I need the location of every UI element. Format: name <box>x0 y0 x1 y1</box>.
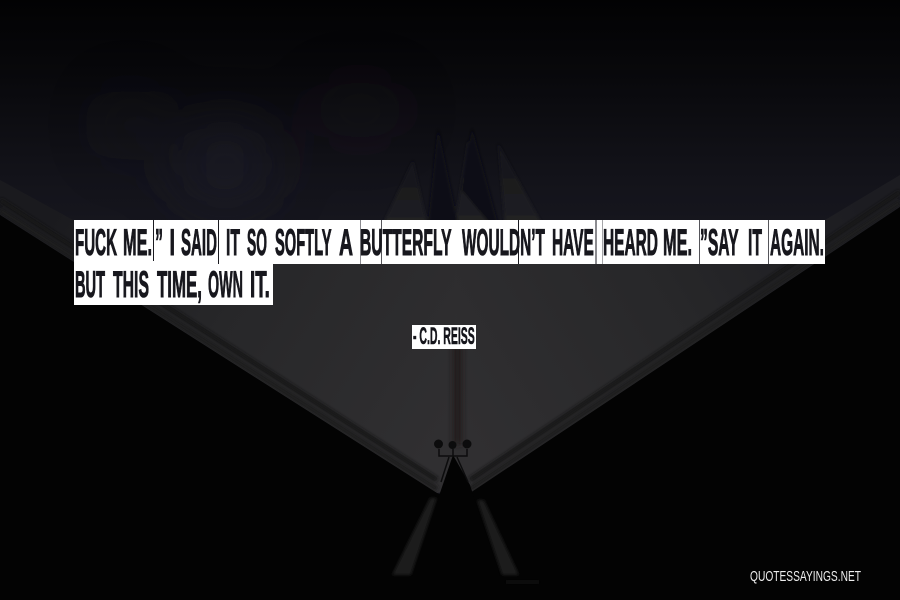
quote strip: line one <box>74 220 825 264</box>
background: clouds <box>100 80 410 205</box>
quote highlight and text <box>74 220 825 306</box>
quote text: line two <box>75 264 270 306</box>
quote text: line one <box>75 221 824 264</box>
quote text: line one: HEARD <box>603 222 658 264</box>
icon: three lamps <box>434 440 471 482</box>
building: left roof wing <box>0 180 455 493</box>
quote text: line one: BUTTERFLY <box>360 222 452 264</box>
quote text: line one: ME. <box>663 223 692 264</box>
quote text: line one: WOULDN’T <box>462 222 545 264</box>
building: roof edge shading <box>0 192 900 489</box>
building: central pylon <box>412 455 500 576</box>
quote text: line one: ”SAY <box>700 222 739 264</box>
quote text: line one: HAVE <box>552 222 594 264</box>
quote text: line one: A <box>339 222 353 264</box>
quote text: line two: TIME, <box>157 265 202 306</box>
quote text: line one: ME. <box>123 223 152 264</box>
building: dark lower ground <box>0 207 900 600</box>
quote text: line one: IT <box>226 222 240 264</box>
quote text: line one: AGAIN. <box>770 222 824 264</box>
quote strip: line two <box>74 264 273 305</box>
building: centre seam <box>453 340 462 445</box>
author strip <box>412 325 476 349</box>
quote text: line one: ” <box>155 223 163 264</box>
quote text: line two: THIS <box>113 264 149 306</box>
quote text: line one: SAID <box>181 221 217 263</box>
quote text: line two: BUT <box>75 264 105 305</box>
quote text: line one: IT <box>748 222 762 264</box>
building: right roof wing <box>455 175 900 493</box>
quote text: line one: I <box>170 223 175 264</box>
strip seams <box>154 220 768 264</box>
author name: - C.D. REISS <box>413 322 475 349</box>
building: central tower spires <box>383 128 542 224</box>
quote text: line one: FUCK <box>75 221 117 263</box>
quote text: line one: SO <box>247 222 267 263</box>
quote text: line one: SOFTLY <box>275 222 332 263</box>
building: support legs <box>392 498 540 582</box>
quote text: line two: IT. <box>250 264 270 306</box>
quote text: line two: OWN <box>208 264 243 305</box>
author attribution <box>412 322 476 349</box>
